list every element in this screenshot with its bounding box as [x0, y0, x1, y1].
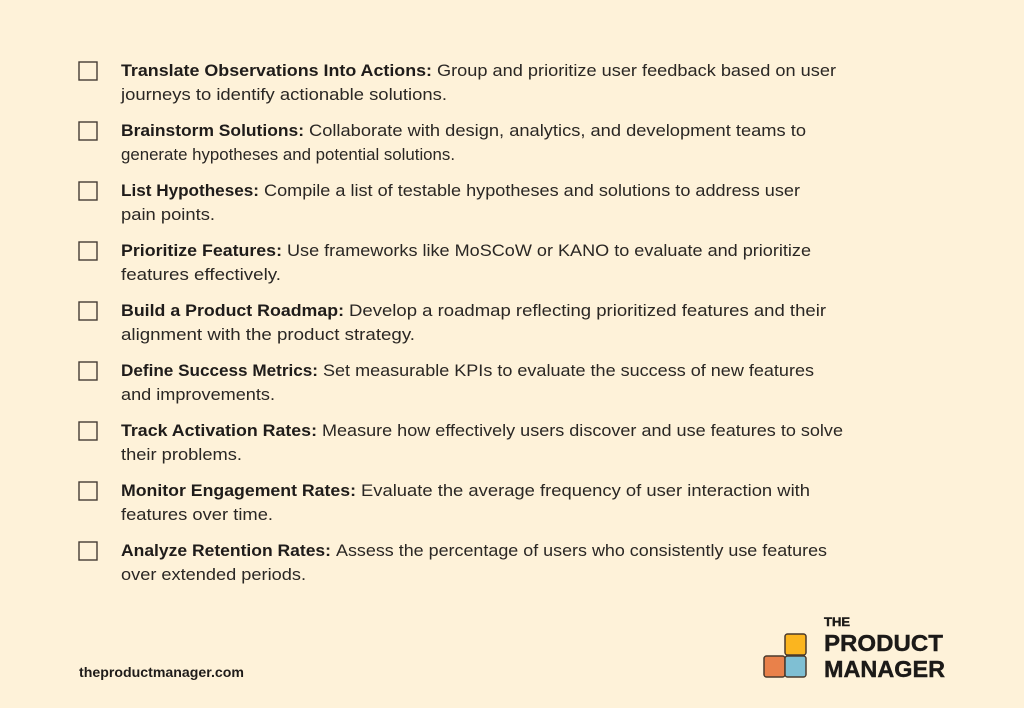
item: build a product roadmap: Build a Product Roadmap: [121, 302, 344, 320]
item: monitor engagement rates: Evaluate the average frequency of user interaction with [361, 481, 810, 500]
item: list hypotheses: Compile a list of testable hypotheses and solutions to address user [264, 181, 800, 200]
item: analyze retention rates: Analyze Retention Rates: [121, 542, 331, 560]
item: list hypotheses: pain points. [121, 205, 215, 224]
item: build a product roadmap: alignment with the product strategy. [121, 325, 415, 344]
item: list hypotheses [79, 181, 800, 224]
item: define success metrics: Set measurable KPIs to evaluate the success of new features [323, 361, 814, 380]
item: brainstorm solutions: generate hypotheses and potential solutions. [121, 145, 455, 164]
item: build a product roadmap [79, 301, 826, 344]
item: analyze retention rates [79, 541, 827, 584]
logo: The Product Manager [764, 617, 945, 682]
item: brainstorm solutions: Collaborate with design, analytics, and development teams to [309, 121, 806, 140]
item: translate observations: journeys to identify actionable solutions. [120, 85, 447, 104]
item: brainstorm solutions [79, 121, 806, 164]
logo wordmark: PRODUCT [824, 630, 944, 656]
item: monitor engagement rates [79, 481, 810, 524]
logo wordmark: THE [824, 617, 850, 629]
item: track activation rates: Track Activation Rates: [121, 422, 317, 440]
logo wordmark: MANAGER [824, 656, 945, 682]
item: monitor engagement rates: Monitor Engagement Rates: [121, 482, 356, 500]
item: prioritize features [79, 241, 811, 284]
item: monitor engagement rates: features over time. [121, 505, 273, 524]
website url: theproductmanager.com [79, 664, 244, 680]
item: track activation rates [79, 421, 843, 464]
item: prioritize features: Use frameworks like MoSCoW or KANO to evaluate and prioritize [287, 241, 811, 260]
item: translate observations: Translate Observations Into Actions: [121, 62, 432, 80]
item: define success metrics: and improvements. [121, 385, 275, 404]
item: list hypotheses: List Hypotheses: [121, 182, 259, 200]
item: define success metrics [79, 361, 814, 404]
item: translate observations [79, 61, 836, 104]
item: analyze retention rates: over extended periods. [121, 565, 306, 584]
item: prioritize features: features effectively. [121, 265, 281, 284]
icon: logo blocks [764, 634, 806, 677]
item: build a product roadmap: Develop a roadmap reflecting prioritized features and their [349, 301, 826, 320]
item: brainstorm solutions: Brainstorm Solutions: [121, 122, 304, 140]
checklist [79, 61, 843, 584]
item: track activation rates: Measure how effectively users discover and use features to solve [322, 421, 843, 440]
item: track activation rates: their problems. [121, 445, 242, 464]
item: prioritize features: Prioritize Features: [121, 242, 282, 260]
item: translate observations: Group and prioritize user feedback based on user [437, 61, 836, 80]
logo wordmark [824, 617, 945, 682]
item: analyze retention rates: Assess the percentage of users who consistently use features [336, 541, 827, 560]
item: define success metrics: Define Success Metrics: [121, 362, 318, 380]
